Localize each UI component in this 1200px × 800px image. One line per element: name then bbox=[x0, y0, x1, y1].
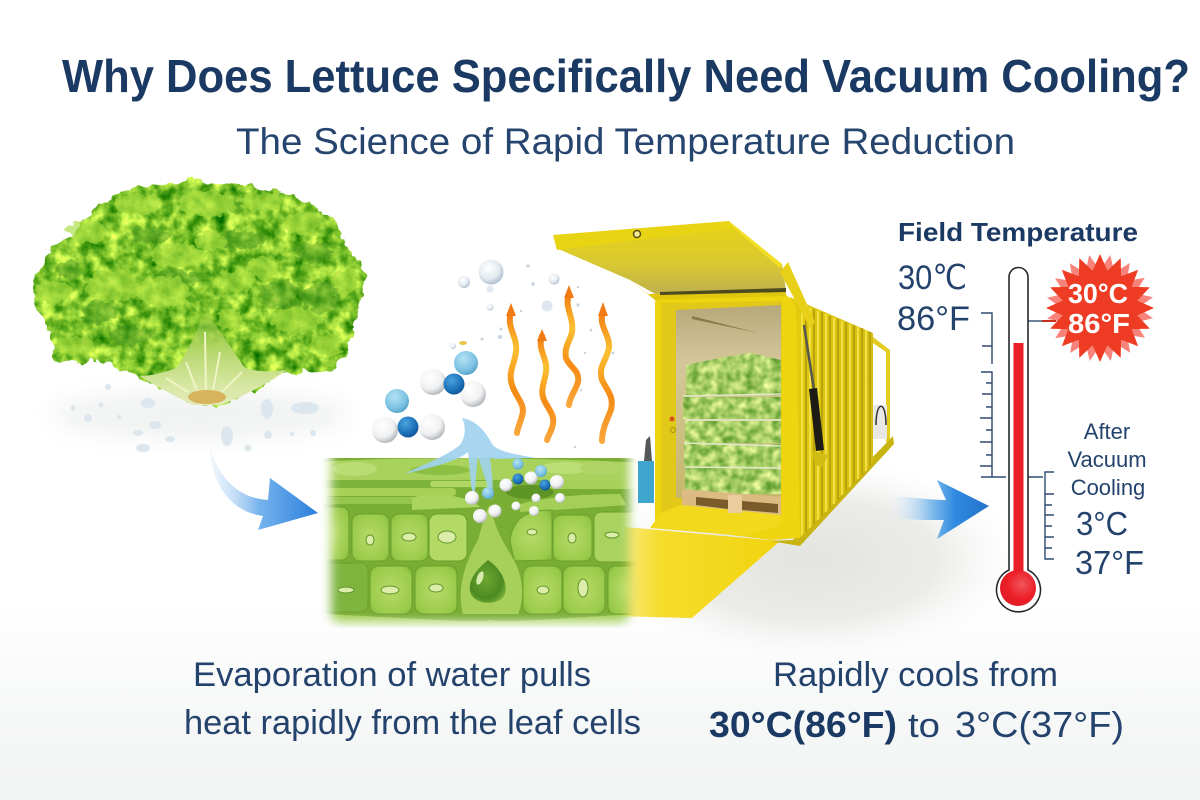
caption: evaporation: Evaporation of water pulls bbox=[193, 656, 591, 694]
arrow: lettuce to leaf cells bbox=[210, 450, 318, 530]
heat waves bbox=[506, 285, 612, 441]
pallet of lettuce bbox=[682, 353, 781, 515]
caption: rapid cooling: Rapidly cools from bbox=[773, 656, 1058, 694]
heat wave 3 bbox=[564, 285, 578, 405]
label: 3 C: 3°C bbox=[1076, 505, 1128, 542]
ramp bbox=[608, 527, 780, 618]
caption: evaporation bbox=[184, 656, 641, 742]
label: 86 F: 86°F bbox=[897, 300, 970, 338]
thermometer panel bbox=[897, 217, 1163, 612]
starburst: 30C 86F: 30°C bbox=[1068, 278, 1128, 309]
wooden pallet bbox=[682, 489, 781, 515]
caption: rapid cooling bbox=[709, 656, 1124, 745]
evaporation stream from leaf bbox=[404, 418, 535, 500]
organelle details bbox=[338, 529, 619, 597]
upper tissue layers bbox=[318, 458, 642, 512]
starburst: 30C 86F: 86°F bbox=[1068, 308, 1130, 339]
lid bbox=[553, 221, 786, 300]
arrow: container to thermometer bbox=[893, 480, 989, 539]
caption: evaporation: heat rapidly from the leaf cells bbox=[184, 704, 641, 742]
cells row 2 bbox=[320, 563, 640, 614]
illustration: lettuce head bbox=[33, 182, 363, 452]
thermometer body bbox=[997, 268, 1040, 612]
label: 30 C: 30℃ bbox=[898, 259, 967, 297]
container side with ribs bbox=[790, 297, 873, 538]
heat wave 4 bbox=[598, 302, 612, 441]
label: 37 F: 37°F bbox=[1075, 544, 1144, 581]
far end frame bbox=[873, 337, 890, 442]
stem base bbox=[188, 390, 226, 404]
base rail bbox=[770, 436, 894, 546]
molecule left bbox=[372, 389, 445, 443]
blue tank bbox=[638, 436, 654, 503]
gas strut and hinge arm bbox=[780, 262, 828, 467]
caption: rapid cooling: 3°C(37°F) bbox=[955, 704, 1124, 745]
molecule right bbox=[420, 351, 486, 407]
label: after vacuum cooling bbox=[1067, 419, 1147, 500]
cells row 1 bbox=[320, 507, 640, 562]
illustration: leaf cell cross-section bbox=[318, 458, 642, 628]
caption: rapid cooling: 30°C(86°F) bbox=[709, 704, 897, 745]
caption: rapid cooling: to bbox=[908, 707, 940, 745]
leaf shading and highlights bbox=[37, 190, 357, 356]
water droplets under lettuce bbox=[70, 384, 319, 452]
subtitle: The Science of Rapid Temperature Reduction bbox=[236, 121, 1015, 162]
rising water droplets bbox=[450, 260, 614, 448]
stalk and ribs bbox=[140, 312, 287, 405]
small molecules in tissue bbox=[465, 458, 565, 523]
door frame bbox=[655, 293, 800, 540]
bottom layer bbox=[328, 614, 632, 626]
label: after vacuum cooling: Vacuum bbox=[1067, 447, 1147, 472]
label: after vacuum cooling: After bbox=[1084, 419, 1130, 444]
illustration: yellow vacuum cooling container bbox=[553, 221, 894, 618]
label: after vacuum cooling: Cooling bbox=[1071, 475, 1145, 500]
label: field temperature: Field Temperature bbox=[898, 217, 1138, 247]
water molecules bbox=[372, 351, 565, 523]
starburst: 30C 86F bbox=[1037, 245, 1163, 371]
stoma with guard cell bbox=[461, 505, 522, 614]
interior bbox=[650, 301, 782, 536]
heat wave 1 bbox=[506, 303, 523, 433]
heat wave 2 bbox=[537, 329, 553, 440]
scale ticks bbox=[980, 313, 1054, 559]
